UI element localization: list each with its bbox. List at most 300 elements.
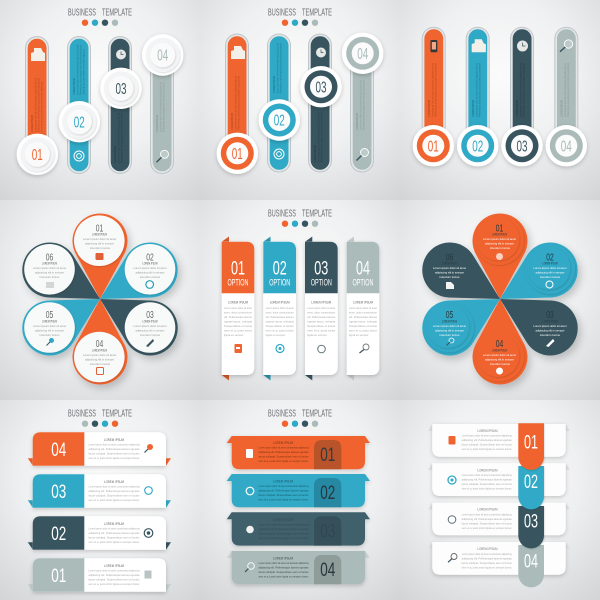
row 03: adipiscing elit. Pellentesque laoreet egestas <box>88 490 140 493</box>
column 04 <box>347 236 379 380</box>
band 02: adipiscing elit. Pellentesque laoreet egestas <box>258 490 309 492</box>
disc 01: 01 <box>428 138 439 155</box>
row 04: lacus volutpat. Suspendisse sem et luctus <box>88 452 140 456</box>
row 01: Lorem ipsum dolor sit amet consectetur adipiscing <box>462 434 512 438</box>
column 04: egetas lacus, volutpat <box>349 320 377 324</box>
disc text 04: 04 <box>496 339 504 350</box>
disc text 03: adipiscing elit in semper <box>136 330 165 332</box>
pill: orange: Pellentesque laoreet egestas lacus tincidunt suspendisse <box>38 77 41 132</box>
column 03: OPTION <box>311 278 332 288</box>
disc text 02 <box>534 252 567 288</box>
band 01 <box>227 436 370 469</box>
row 02: LOREM IPSUM <box>478 468 498 472</box>
heading: BUSINESS <box>268 208 296 220</box>
column 02: OPTION <box>269 278 290 288</box>
column 03: egetas lacus, volutpat <box>307 320 336 324</box>
pill: teal: Lorem ipsum dolor sit amet consectetur adipiscing elit sed <box>77 44 80 95</box>
heading: BUSINESS <box>268 408 296 420</box>
disc text 01: Lorem ipsum dolor sit amet <box>483 238 516 241</box>
row 02: adipiscing elit. Pellentesque laoreet egestas <box>462 478 513 482</box>
column 01 <box>222 236 254 380</box>
row 03: sem et a, justo tortor ligula eu semper donec <box>462 527 513 530</box>
row 04: LOREM IPSUM <box>478 547 498 551</box>
disc text 06 <box>433 252 466 289</box>
column 03 <box>305 236 338 380</box>
disc text 05: adipiscing elit in semper <box>435 330 464 332</box>
colour dots <box>82 20 118 26</box>
disc 03: 03 <box>116 81 126 98</box>
strip segment 02 <box>518 466 544 509</box>
disc text 03 <box>125 302 175 353</box>
disc text 02: LOREM IPSUM <box>142 262 158 266</box>
disc text 03: LOREM IPSUM <box>142 320 158 324</box>
row 03 <box>28 474 171 508</box>
panel: horizontal rows with colour blocks <box>28 408 171 592</box>
disc 04 <box>342 33 383 74</box>
disc 03: 03 <box>316 79 326 96</box>
column 04: elit. Pellentesque laoreet <box>349 316 377 319</box>
band 02: lacus volutpat. Suspendisse sem et luctus <box>258 494 309 497</box>
column 03: amet, dolor consectetuer <box>307 312 336 314</box>
row 01: LOREM IPSUM <box>478 429 498 433</box>
disc text 01: interdum luctus <box>490 247 511 250</box>
row 02: Lorem ipsum dolor sit amet consectetur adipiscing <box>88 528 140 530</box>
column 02: sem et a, justo tortor <box>266 330 294 332</box>
band 01: sem et a, justo tortor ligula eu semper donec <box>258 460 309 463</box>
column 03: elit. Pellentesque laoreet <box>307 316 336 319</box>
disc 04: 04 <box>357 46 368 63</box>
disc text 02: LOREM IPSUM <box>542 262 558 266</box>
row 01: sem et a, justo tortor ligula eu semper donec <box>462 448 513 451</box>
column 02: amet, dolor consectetuer <box>266 312 294 314</box>
band 01: 01 <box>320 445 335 466</box>
disc text 01 <box>74 215 125 266</box>
column 01: 01 <box>231 258 245 280</box>
band 04: lacus volutpat. Suspendisse sem et luctus <box>258 571 309 574</box>
pill: dark: Lorem ipsum dolor sit amet consectetur adipiscing elit sed <box>118 112 121 163</box>
column 02: Suspendisse et luctus <box>266 325 295 328</box>
column 02: ligula eu semper. <box>266 334 286 337</box>
petals <box>422 213 578 385</box>
row 01: lacus volutpat. Suspendisse sem et luctus <box>88 578 140 582</box>
disc text 06 <box>24 244 75 295</box>
row 02: 02 <box>51 524 66 545</box>
row 03: LOREM IPSUM <box>104 480 124 484</box>
disc text 02: Lorem ipsum dolor sit amet <box>134 267 167 270</box>
pill: orange: Pellentesque laoreet egestas lacus tincidunt suspendisse <box>435 62 438 117</box>
column 04: ligula eu semper. <box>349 334 369 337</box>
column 04: sem et a, justo tortor <box>349 330 377 332</box>
disc text 04 <box>74 332 125 382</box>
column 04: amet, dolor consectetuer <box>349 312 377 314</box>
disc text 04: interdum luctus <box>90 363 111 366</box>
pill: teal <box>67 36 91 174</box>
column 03: sem et a, justo tortor <box>307 330 336 332</box>
disc 04 <box>142 34 183 76</box>
disc text 03: interdum luctus <box>540 334 561 337</box>
pill: orange <box>225 34 249 172</box>
disc text 05: 05 <box>46 310 54 321</box>
column 04: 04 <box>356 258 370 280</box>
band 02: LOREM IPSUM <box>273 480 293 484</box>
column 02: LOREM IPSUM <box>270 300 290 304</box>
pill: dark: LOREM IPSUM <box>114 146 117 163</box>
disc text 06: interdum luctus <box>40 276 60 279</box>
strip segment 04 <box>518 545 544 587</box>
pill: dark: LOREM IPSUM <box>516 100 519 117</box>
band 04: sem et a, justo tortor ligula eu semper donec <box>258 576 309 578</box>
pill: orange <box>25 36 49 174</box>
disc text 04: interdum luctus <box>490 363 511 366</box>
heading: BUSINESS <box>268 8 296 18</box>
disc text 04 <box>483 339 516 374</box>
pill: orange: LOREM IPSUM <box>428 100 431 117</box>
column 02: Lorem ipsum dolor sit amet <box>266 307 294 310</box>
band 01: adipiscing elit. Pellentesque laoreet egestas <box>258 451 309 454</box>
column 04: LOREM IPSUM <box>353 300 373 304</box>
disc text 02: Lorem ipsum dolor sit amet <box>534 267 567 270</box>
disc text 02: adipiscing elit in semper <box>536 272 565 274</box>
pill: orange: LOREM IPSUM <box>31 115 34 132</box>
disc text 01: 01 <box>496 224 504 234</box>
disc text 05: LOREM IPSUM <box>42 320 57 324</box>
heading: BUSINESS <box>68 8 96 18</box>
disc text 01: 01 <box>96 224 104 234</box>
row 04: adipiscing elit. Pellentesque laoreet egestas <box>88 448 140 451</box>
row 01: adipiscing elit. Pellentesque laoreet egestas <box>88 574 140 577</box>
row 03: Lorem ipsum dolor sit amet consectetur adipiscing <box>88 486 140 488</box>
pill: teal: Lorem ipsum dolor sit amet consectetur adipiscing elit sed <box>476 62 479 117</box>
disc text 06: LOREM IPSUM <box>442 262 457 266</box>
pill: dark <box>510 27 534 141</box>
pill: gray: Pellentesque laoreet egestas lacus tincidunt suspendisse <box>567 62 570 117</box>
row 04: Lorem ipsum dolor sit amet consectetur adipiscing <box>462 553 512 556</box>
strip segment 01: 01 <box>524 433 538 454</box>
disc text 04: Lorem ipsum dolor sit amet <box>483 354 516 357</box>
disc text 06: adipiscing elit in semper <box>35 272 64 274</box>
strip segment 04: 04 <box>524 552 538 573</box>
row 03: sem et a, justo tortor ligula eu semper donec <box>88 499 140 502</box>
disc 03 <box>501 125 543 166</box>
row 03: adipiscing elit. Pellentesque laoreet egestas <box>462 518 513 521</box>
disc 04: 04 <box>157 48 168 65</box>
disc 02 <box>59 101 100 142</box>
disc text 06: 06 <box>446 252 454 264</box>
band 04: 04 <box>320 560 336 581</box>
pill: dark: Lorem ipsum dolor sit amet consectetur adipiscing elit sed <box>318 111 321 162</box>
column 02 <box>263 236 296 380</box>
disc text 01: LOREM IPSUM <box>492 232 507 236</box>
disc text 04: LOREM IPSUM <box>492 348 507 352</box>
disc 01 <box>413 125 454 166</box>
row 03: 03 <box>51 482 66 503</box>
disc text 01 <box>483 224 516 260</box>
disc text 04: adipiscing elit in semper <box>85 358 114 362</box>
disc 01 <box>217 133 258 174</box>
pill: dark: Pellentesque laoreet egestas lacus tincidunt suspendisse <box>321 111 324 162</box>
pill: gray: LOREM IPSUM <box>560 100 564 117</box>
row 04 <box>428 542 570 575</box>
pill: teal: LOREM IPSUM <box>472 100 475 117</box>
row 04: adipiscing elit. Pellentesque laoreet egestas <box>462 558 513 560</box>
pill: dark <box>108 36 132 174</box>
band 03: LOREM IPSUM <box>273 518 293 522</box>
colour dots <box>282 20 318 26</box>
row 04: lacus volutpat. Suspendisse sem et luctus <box>462 562 513 565</box>
pill: orange: Lorem ipsum dolor sit amet consectetur adipiscing <box>41 81 44 132</box>
band 03: Lorem ipsum dolor sit amet consectetur adipiscing <box>258 524 309 526</box>
disc text 03: Lorem ipsum dolor sit amet <box>534 325 567 328</box>
band 02 <box>227 474 370 507</box>
panel: six petal diagram with white discs <box>22 213 178 385</box>
row 03: LOREM IPSUM <box>478 508 498 512</box>
column 01: amet, dolor consectetuer <box>224 312 252 314</box>
band 01: Lorem ipsum dolor sit amet consectetur adipiscing <box>258 446 309 450</box>
column 04: Lorem ipsum dolor sit amet <box>349 307 377 310</box>
disc text 03 <box>534 310 567 347</box>
panel: white rows with vertical number strip <box>428 423 570 587</box>
row 01 <box>28 558 171 592</box>
disc text 06: Lorem ipsum dolor sit amet <box>433 267 466 270</box>
band 02: 02 <box>320 483 335 504</box>
column 01: elit. Pellentesque laoreet <box>224 316 252 319</box>
band 02: sem et a, justo tortor ligula eu semper donec <box>258 498 309 502</box>
disc text 04: adipiscing elit in semper <box>485 358 514 362</box>
disc text 01: adipiscing elit in semper <box>485 242 514 246</box>
pill: gray: Lorem ipsum dolor sit amet consectetur adipiscing elit sed <box>564 62 567 117</box>
row 04: sem et a, justo tortor ligula eu semper donec <box>88 457 140 460</box>
disc text 05: adipiscing elit in semper <box>35 330 64 332</box>
pill: dark: Lorem ipsum dolor sit amet consectetur adipiscing elit sed <box>520 62 523 117</box>
pill: teal: LOREM IPSUM <box>273 76 276 93</box>
disc text 03: interdum luctus <box>140 334 161 337</box>
disc text 02: 02 <box>146 252 154 264</box>
disc text 03: 03 <box>546 310 554 321</box>
row 02: sem et a, justo tortor ligula eu semper donec <box>462 488 513 490</box>
disc text 05: Lorem ipsum dolor sit amet <box>433 325 466 328</box>
panel: vertical pills with coloured rings <box>217 8 383 174</box>
row 03: lacus volutpat. Suspendisse sem et luctus <box>462 522 513 526</box>
disc text 02: interdum luctus <box>540 276 561 279</box>
row 02: lacus volutpat. Suspendisse sem et luctus <box>462 483 513 486</box>
column 03: 03 <box>314 258 328 280</box>
disc text 05: 05 <box>446 310 454 321</box>
disc text 06: 06 <box>46 252 54 264</box>
band 03: 03 <box>320 522 335 542</box>
disc 02: 02 <box>74 114 85 131</box>
disc 01 <box>17 134 58 175</box>
row 03 <box>428 503 570 535</box>
heading: TEMPLATE <box>102 8 132 18</box>
heading: TEMPLATE <box>302 8 332 18</box>
pill: gray <box>554 27 578 141</box>
pill: teal <box>267 34 291 172</box>
colour dots <box>282 220 318 227</box>
disc 01: 01 <box>32 147 43 164</box>
disc text 05: interdum luctus <box>440 334 460 337</box>
strip segment 02: 02 <box>524 472 538 493</box>
row 01: 01 <box>51 566 66 587</box>
pill: orange: Lorem ipsum dolor sit amet consectetur adipiscing elit sed <box>432 62 435 117</box>
pill: orange <box>422 27 446 141</box>
strip segment 03 <box>518 506 544 548</box>
disc 01: 01 <box>232 146 243 163</box>
column 02: elit. Pellentesque laoreet <box>266 316 294 319</box>
band 04: adipiscing elit. Pellentesque laoreet egestas <box>258 566 309 570</box>
disc text 05: LOREM IPSUM <box>442 320 457 324</box>
pill: orange: Pellentesque laoreet egestas lacus tincidunt suspendisse <box>238 75 241 130</box>
row 01: Lorem ipsum dolor sit amet consectetur adipiscing <box>88 570 140 572</box>
disc text 01: interdum luctus <box>90 247 111 250</box>
pill: gray: Lorem ipsum dolor sit amet consectetur adipiscing elit sed <box>160 81 163 132</box>
band 04: Lorem ipsum dolor sit amet consectetur adipiscing <box>258 562 309 565</box>
disc text 06: Lorem ipsum dolor sit amet <box>33 267 66 270</box>
disc 02: 02 <box>472 138 483 155</box>
band 04: LOREM IPSUM <box>273 556 293 560</box>
disc text 03: 03 <box>146 310 154 321</box>
pill: gray: Lorem ipsum dolor sit amet consectetur adipiscing elit sed <box>360 79 363 130</box>
disc text 05: interdum luctus <box>40 334 60 337</box>
column 02: 02 <box>273 258 287 280</box>
row 01: lacus volutpat. Suspendisse sem et luctus <box>462 444 513 446</box>
band 01: lacus volutpat. Suspendisse sem et luctus <box>258 456 309 458</box>
disc text 03: adipiscing elit in semper <box>536 330 565 332</box>
disc 02 <box>259 99 300 141</box>
pill: gray: LOREM IPSUM <box>156 115 159 132</box>
panel: horizontal colour bands <box>227 408 370 584</box>
pill: teal: Pellentesque laoreet egestas lacus tincidunt suspendisse <box>280 42 283 93</box>
pill: orange: Lorem ipsum dolor sit amet consectetur adipiscing elit sed <box>35 77 38 132</box>
row 04: 04 <box>51 440 67 461</box>
heading: TEMPLATE <box>302 408 332 420</box>
pill: gray: Pellentesque laoreet egestas lacus tincidunt suspendisse <box>163 81 166 132</box>
disc text 01: Lorem ipsum dolor sit amet <box>83 238 116 241</box>
row 02: sem et a, justo tortor ligula eu semper donec <box>88 541 140 544</box>
row 02 <box>428 463 570 496</box>
petals <box>22 213 178 385</box>
colour dots <box>282 420 318 427</box>
pill: dark: LOREM IPSUM <box>314 145 317 162</box>
column 01: Suspendisse et luctus <box>224 325 253 328</box>
colour dots <box>82 420 118 427</box>
disc text 05 <box>433 310 466 346</box>
pill: teal: Pellentesque laoreet egestas lacus tincidunt suspendisse <box>479 62 482 117</box>
row 02: lacus volutpat. Suspendisse sem et luctus <box>88 536 140 540</box>
strip segment 03: 03 <box>524 512 538 533</box>
band 02: Lorem ipsum dolor sit amet consectetur adipiscing <box>258 485 309 488</box>
disc 02 <box>457 125 498 166</box>
band 03: lacus volutpat. Suspendisse sem et luctus <box>258 532 309 536</box>
pill: teal: Pellentesque laoreet egestas lacus tincidunt suspendisse <box>80 44 83 95</box>
disc 04: 04 <box>561 138 572 155</box>
pill: teal: Lorem ipsum dolor sit amet consectetur adipiscing <box>83 48 86 95</box>
heading: BUSINESS <box>68 408 96 420</box>
disc text 02: adipiscing elit in semper <box>136 272 165 274</box>
column 03: LOREM IPSUM <box>311 300 331 304</box>
row 04: sem et a, justo tortor ligula eu semper donec <box>462 566 513 570</box>
column 01: egetas lacus, volutpat <box>224 320 252 324</box>
pill: gray: Pellentesque laoreet egestas lacus tincidunt suspendisse <box>363 79 366 130</box>
pill: gray <box>350 38 374 172</box>
disc text 05 <box>24 302 75 353</box>
band 01: LOREM IPSUM <box>273 441 293 445</box>
row 04: Lorem ipsum dolor sit amet consectetur adipiscing <box>88 444 140 446</box>
disc text 01: LOREM IPSUM <box>92 232 107 236</box>
band 03: sem et a, justo tortor ligula eu semper donec <box>258 537 309 540</box>
row 04: LOREM IPSUM <box>104 438 124 442</box>
pill: dark <box>308 34 332 172</box>
disc text 03: Lorem ipsum dolor sit amet <box>134 325 167 328</box>
inner layers: orange and teal discs <box>424 215 575 382</box>
disc 03 <box>100 68 142 109</box>
column 03: ligula eu semper. <box>307 334 328 337</box>
panel: four option columns <box>222 208 379 380</box>
disc text 06: adipiscing elit in semper <box>435 272 464 274</box>
row 03: lacus volutpat. Suspendisse sem et luctus <box>88 494 140 498</box>
disc text 06: interdum luctus <box>440 276 460 279</box>
pill: dark: Pellentesque laoreet egestas lacus tincidunt suspendisse <box>523 62 526 117</box>
pill: orange: Lorem ipsum dolor sit amet consectetur adipiscing elit sed <box>235 75 238 130</box>
disc text 01: adipiscing elit in semper <box>85 242 114 246</box>
row 02: LOREM IPSUM <box>104 522 124 526</box>
column 01: sem et a, justo tortor <box>224 330 252 332</box>
row 01: sem et a, justo tortor ligula eu semper donec <box>88 583 140 586</box>
band 03 <box>227 512 370 546</box>
disc text 04: 04 <box>96 339 104 350</box>
row 01: LOREM IPSUM <box>104 564 124 568</box>
disc text 04: Lorem ipsum dolor sit amet <box>83 354 116 357</box>
band 04 <box>227 551 370 584</box>
column 01: OPTION <box>228 278 248 288</box>
column 02: egetas lacus, volutpat <box>266 320 294 324</box>
row 02: adipiscing elit. Pellentesque laoreet egestas <box>88 532 140 535</box>
disc text 02: 02 <box>546 252 554 264</box>
heading: TEMPLATE <box>302 208 332 220</box>
panel: vertical pills with white discs <box>17 8 183 175</box>
disc text 06: LOREM IPSUM <box>42 262 57 266</box>
disc text 02: interdum luctus <box>140 276 161 279</box>
disc text 04: LOREM IPSUM <box>92 348 107 352</box>
panel: six petal diagram coloured <box>422 213 578 385</box>
pill: dark: Pellentesque laoreet egestas lacus tincidunt suspendisse <box>121 112 124 163</box>
pill: gray <box>150 40 174 174</box>
column 03: Lorem ipsum dolor sit amet <box>307 307 336 310</box>
column 03: Suspendisse et luctus <box>307 325 336 328</box>
row 02 <box>28 516 171 550</box>
row 01: adipiscing elit. Pellentesque laoreet egestas <box>462 439 513 442</box>
row 04 <box>28 432 171 466</box>
disc text 05: Lorem ipsum dolor sit amet <box>33 325 66 328</box>
column 01: LOREM IPSUM <box>228 300 248 304</box>
disc 03: 03 <box>516 138 528 155</box>
column 01: Lorem ipsum dolor sit amet <box>224 307 252 310</box>
column 04: OPTION <box>352 278 374 288</box>
disc 02: 02 <box>274 113 285 130</box>
pill: teal: LOREM IPSUM <box>73 78 76 95</box>
disc text 02 <box>125 244 175 295</box>
column 01: ligula eu semper. <box>224 334 244 337</box>
disc text 03: LOREM IPSUM <box>542 320 558 324</box>
disc 03 <box>300 66 342 107</box>
row 01 <box>428 424 570 457</box>
strip segment 01 <box>518 423 544 470</box>
disc 04 <box>546 125 587 166</box>
row 02: Lorem ipsum dolor sit amet consectetur adipiscing <box>462 474 512 477</box>
column 04: Suspendisse et luctus <box>349 325 378 328</box>
pill: teal <box>466 27 490 141</box>
panel: aligned vertical pills <box>413 27 587 166</box>
pill: gray: LOREM IPSUM <box>356 113 359 130</box>
